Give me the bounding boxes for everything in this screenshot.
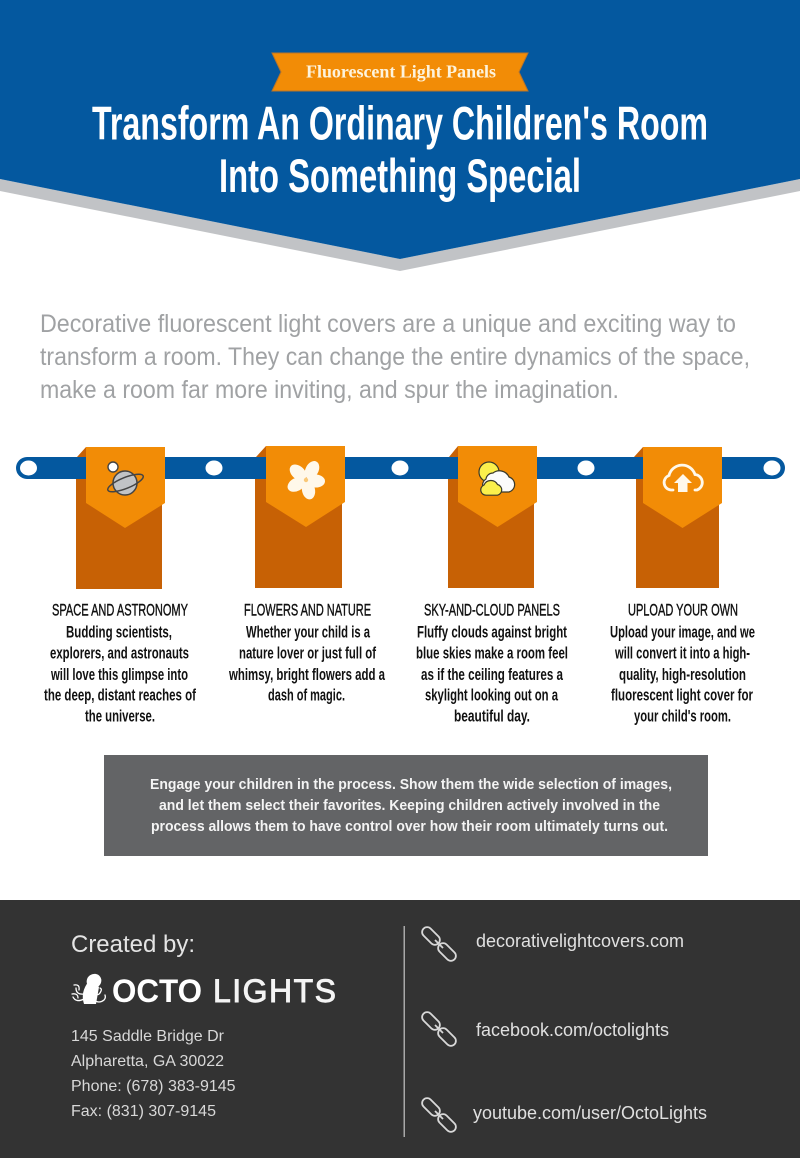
address block: Alpharetta, GA 30022 <box>71 1053 224 1070</box>
intro paragraph: transform a room. They can change the entire dynamics of the space, <box>40 343 750 371</box>
callout: engage your children: process allows them to have control over how their room ultimately turns out. <box>151 819 668 835</box>
icon: sun and clouds <box>479 462 515 495</box>
text block: sky-and-cloud panels: Fluffy clouds against bright <box>417 624 567 642</box>
panel: sky and cloud tab <box>448 446 537 588</box>
footer panel <box>0 900 800 1158</box>
callout: engage your children <box>104 755 708 856</box>
icon: flower <box>285 459 325 501</box>
text block: space and astronomy: explorers, and astronauts <box>50 644 189 662</box>
intro paragraph <box>40 310 750 404</box>
text block: upload your own: quality, high-resolution <box>619 666 746 684</box>
text block: flowers and nature: Whether your child is a <box>246 624 371 642</box>
text block: sky-and-cloud panels: as if the ceiling features a <box>421 666 564 684</box>
text block: space and astronomy: the universe. <box>85 708 155 726</box>
address block <box>71 1028 236 1120</box>
text block: sky-and-cloud panels: SKY-AND-CLOUD PANELS <box>424 602 560 620</box>
text block: flowers and nature: whimsy, bright flowers add a <box>228 666 386 684</box>
logo: Octo Lights: LIGHTS <box>213 973 336 1009</box>
text block: sky-and-cloud panels <box>416 602 568 726</box>
link: website <box>420 925 684 963</box>
text block: upload your own <box>610 602 755 726</box>
icon: cloud upload <box>664 465 702 492</box>
intro paragraph: make a room far more inviting, and spur the imagination. <box>40 376 619 404</box>
icon: planet <box>106 462 145 495</box>
callout: engage your children: Engage your children in the process. Show them the wide selection of images, <box>150 777 672 793</box>
link: youtube <box>420 1096 707 1134</box>
text block: flowers and nature: nature lover or just full of <box>239 644 376 662</box>
panel: flowers and nature tab <box>255 446 345 588</box>
text block: flowers and nature: dash of magic. <box>268 686 345 704</box>
link: youtube: youtube.com/user/OctoLights <box>473 1103 707 1123</box>
text block: sky-and-cloud panels: skylight looking out on a <box>425 686 559 704</box>
address block: 145 Saddle Bridge Dr <box>71 1028 225 1045</box>
timeline bar <box>16 457 785 479</box>
callout: engage your children: and let them select their favorites. Keeping children actively involved in the <box>159 798 660 814</box>
logo: Octo Lights <box>72 971 336 1009</box>
text block: flowers and nature <box>228 602 386 704</box>
header banner <box>0 0 800 271</box>
link: facebook <box>420 1010 669 1048</box>
link: website: decorativelightcovers.com <box>476 931 684 951</box>
text block: space and astronomy: SPACE AND ASTRONOMY <box>52 602 188 620</box>
text block: flowers and nature: FLOWERS AND NATURE <box>244 602 371 620</box>
text block: space and astronomy: will love this glimpse into <box>50 666 188 684</box>
text block: upload your own: your child's room. <box>634 708 731 726</box>
logo: Octo Lights: OCTO <box>112 973 202 1009</box>
panel: space and astronomy tab <box>76 447 165 589</box>
link: facebook: facebook.com/octolights <box>476 1020 669 1040</box>
title <box>92 98 708 203</box>
text block: upload your own: UPLOAD YOUR OWN <box>628 602 738 620</box>
text block: sky-and-cloud panels: beautiful day. <box>454 708 530 726</box>
text block: space and astronomy: the deep, distant reaches of <box>44 686 196 704</box>
text block: sky-and-cloud panels: blue skies make a room feel <box>416 644 568 662</box>
ribbon: Fluorescent Light Panels: Fluorescent Light Panels <box>306 62 496 82</box>
intro paragraph: Decorative fluorescent light covers are a unique and exciting way to <box>40 310 736 338</box>
ribbon: Fluorescent Light Panels <box>272 53 528 91</box>
panel: upload your own tab <box>634 447 722 588</box>
text block: space and astronomy: Budding scientists, <box>66 624 172 642</box>
address block: Fax: (831) 307-9145 <box>71 1103 216 1120</box>
created by label: Created by: <box>71 931 195 958</box>
address block: Phone: (678) 383-9145 <box>71 1078 236 1095</box>
title: Into Something Special <box>219 150 581 203</box>
text block: space and astronomy <box>44 602 196 726</box>
